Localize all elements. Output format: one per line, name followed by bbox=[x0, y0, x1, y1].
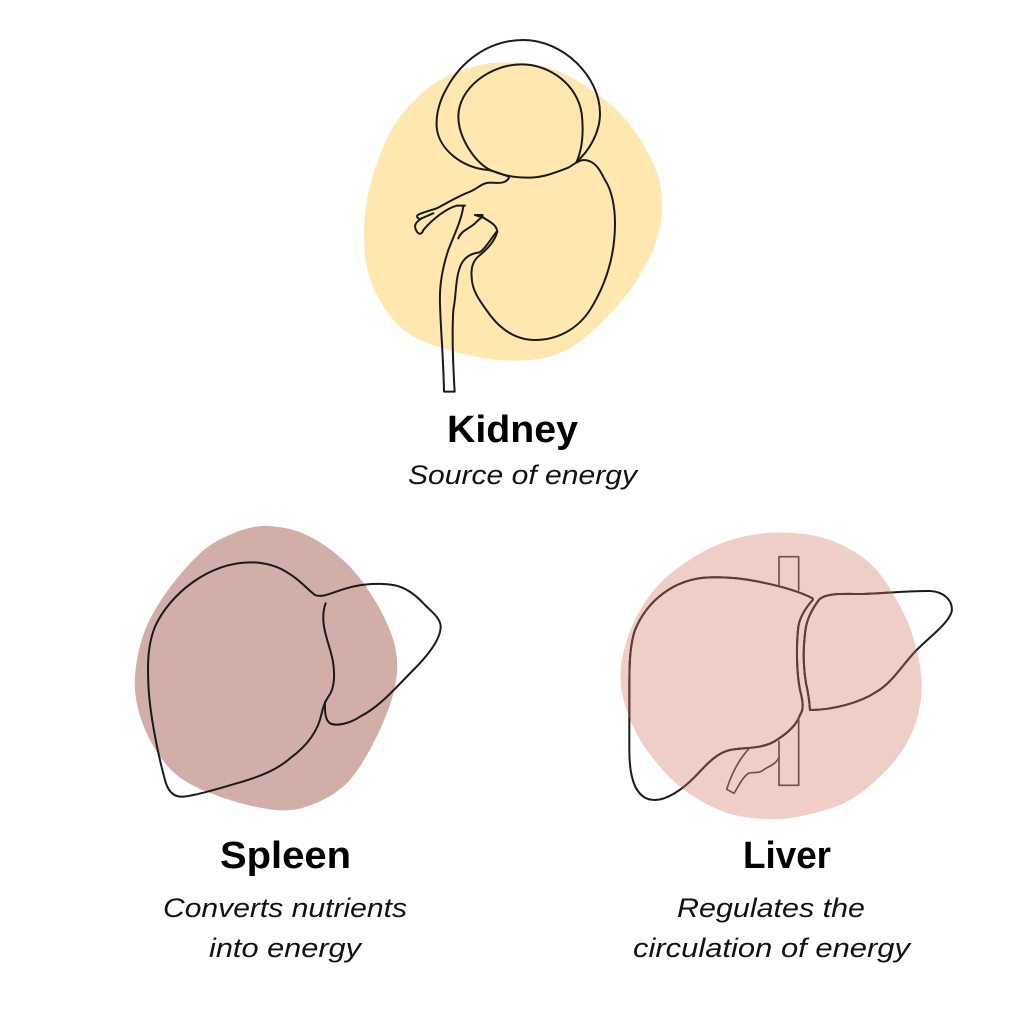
text: liver description bbox=[633, 893, 912, 963]
panel: kidney bbox=[364, 40, 662, 490]
blob: spleen mauve background bbox=[135, 526, 397, 810]
text: spleen description: into energy bbox=[209, 933, 363, 963]
line art: liver lines inside blob bbox=[628, 556, 917, 794]
illustration: kidney bbox=[364, 40, 662, 392]
blob: kidney yellow background bbox=[364, 62, 662, 361]
heading: Spleen: Spleen bbox=[220, 835, 351, 877]
line art: kidney drawing bbox=[415, 40, 615, 392]
text: kidney description: Source of energy bbox=[408, 460, 639, 490]
blob: liver pink background bbox=[620, 532, 922, 819]
text: spleen description: Converts nutrients bbox=[163, 893, 407, 923]
heading: Liver: Liver bbox=[743, 835, 831, 877]
text: liver description: Regulates the bbox=[677, 893, 865, 923]
line art: liver outline bbox=[629, 577, 952, 800]
illustration: liver bbox=[620, 532, 952, 819]
heading: Kidney: Kidney bbox=[447, 409, 578, 451]
panel: spleen bbox=[135, 526, 441, 963]
text: liver description: circulation of energy bbox=[633, 933, 912, 963]
panel: liver bbox=[620, 532, 952, 963]
text: spleen description bbox=[163, 893, 407, 963]
illustration: spleen bbox=[135, 526, 441, 810]
line art: spleen drawing bbox=[148, 562, 441, 797]
